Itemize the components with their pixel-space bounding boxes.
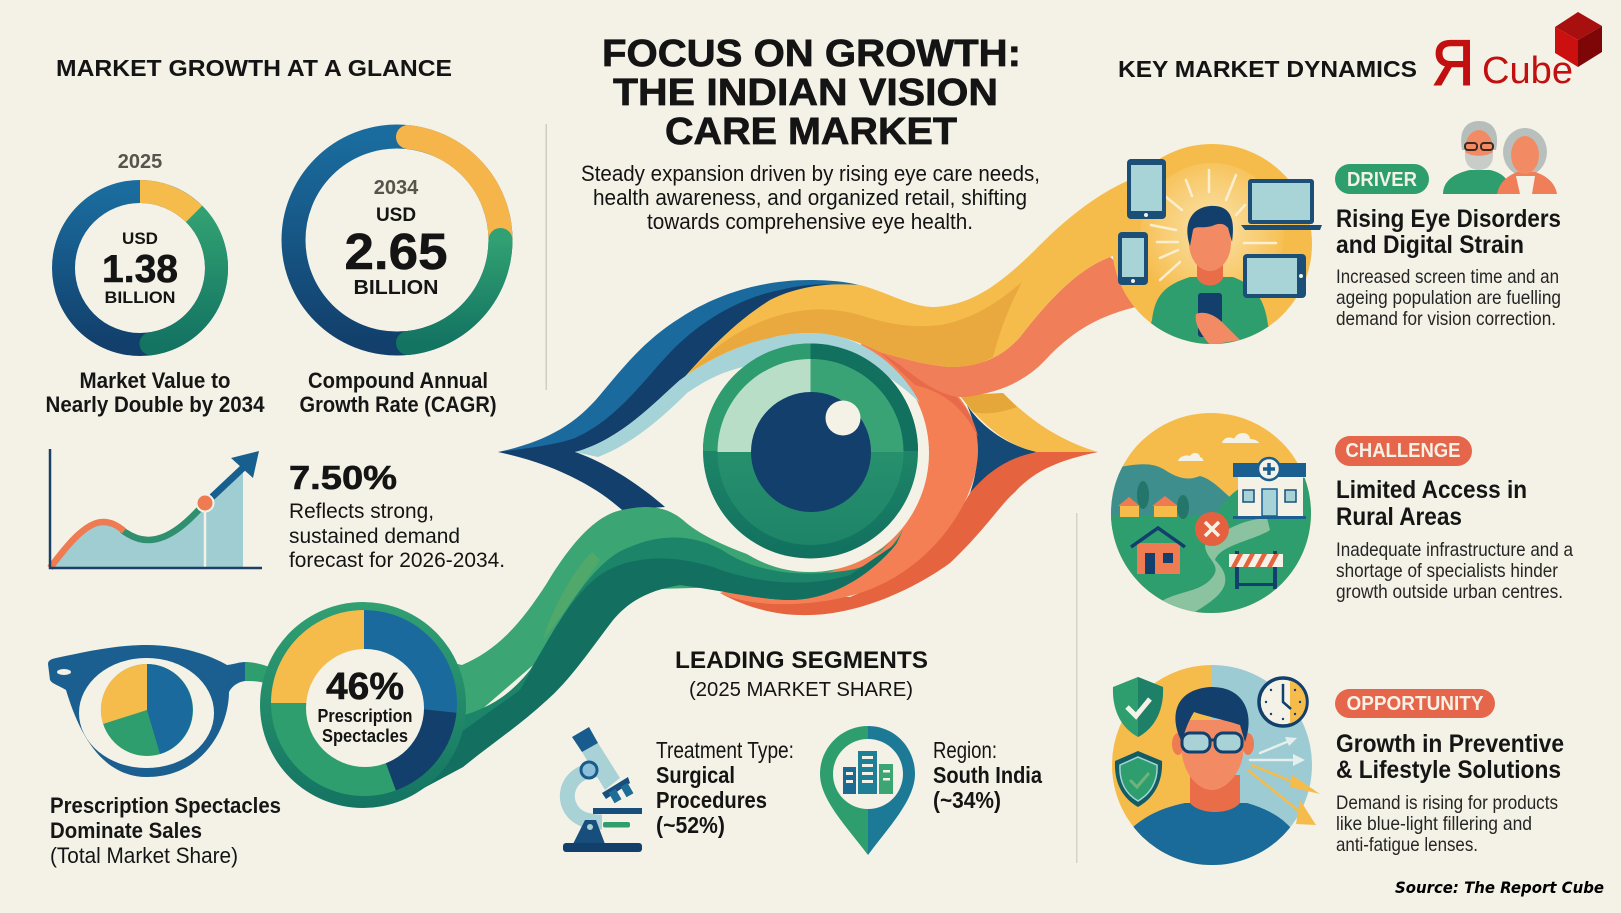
panel divider right	[1076, 513, 1078, 863]
logo: R Cube	[1432, 12, 1602, 99]
badge: opportunity: OPPORTUNITY	[1346, 693, 1484, 715]
ribbon: light orange crescent	[720, 340, 978, 604]
title: FOCUS ON GROWTH:	[602, 33, 1021, 75]
ribbon: light blue lid	[575, 333, 920, 457]
donut: 2025 market value: 2025	[118, 151, 162, 173]
segment text: treatment type	[656, 737, 794, 838]
bridge	[245, 662, 272, 684]
driver body: ageing population are fuelling	[1336, 287, 1561, 309]
segment text: region: South India	[933, 762, 1042, 788]
ears	[1172, 733, 1254, 755]
green shield	[1113, 677, 1163, 737]
segment text: region: Region:	[933, 737, 997, 763]
heading: leading segments	[675, 647, 928, 701]
badge: challenge	[1335, 436, 1472, 466]
ribbon: blue upper lid	[498, 280, 862, 452]
share value: 46%	[326, 666, 404, 708]
ribbon: orange upper flow	[880, 257, 1140, 397]
road barrier	[1229, 551, 1283, 589]
smartphone	[1118, 232, 1148, 285]
opportunity body: like blue-light fillering and	[1336, 813, 1532, 835]
logo: R Cube: Я	[1432, 27, 1474, 99]
glasses frame	[48, 645, 245, 777]
label: prescription spectacles: Dominate Sales	[50, 818, 202, 843]
donut: 2034 market value: BILLION	[354, 277, 438, 299]
tablet	[1127, 159, 1166, 219]
arrow heads	[1285, 737, 1320, 825]
ribbon: yellow flap shade	[960, 393, 1017, 413]
share value	[318, 666, 412, 746]
challenge body: Inadequate infrastructure and a	[1336, 539, 1573, 561]
challenge heading	[1336, 476, 1527, 531]
opportunity heading: Growth in Preventive	[1336, 730, 1564, 758]
heading: leading segments: LEADING SEGMENTS	[675, 647, 928, 674]
opportunity body: anti-fatigue lenses.	[1336, 834, 1478, 856]
clock	[1259, 678, 1307, 726]
card: challenge	[1335, 436, 1573, 603]
donut: 2034 market value: 2.65	[344, 223, 448, 280]
eye white	[691, 334, 929, 572]
person with phone	[1151, 206, 1268, 344]
stat: 7.50% CAGR: Reflects strong,	[289, 499, 434, 523]
icon circle: digital strain	[1112, 144, 1322, 360]
temple rivet	[57, 669, 71, 675]
opportunity body	[1336, 792, 1558, 856]
badge: opportunity	[1335, 689, 1495, 718]
donut: 2025 market value: BILLION	[104, 288, 176, 307]
lens	[79, 658, 214, 768]
challenge heading: Rural Areas	[1336, 503, 1462, 531]
share value: Prescription	[318, 706, 412, 726]
small houses	[1118, 496, 1178, 517]
donut: 2034 market value: USD	[376, 205, 416, 226]
label: market value	[46, 368, 265, 417]
badge: driver	[1335, 164, 1429, 194]
donut: 2034 market value: 2034	[374, 177, 419, 199]
neck	[1190, 775, 1240, 812]
ribbon: yellow flow shade	[690, 282, 1022, 372]
icon: elderly couple	[1443, 121, 1557, 194]
subtitle: health awareness, and organized retail, shifting	[593, 185, 1027, 210]
share ring	[260, 602, 466, 808]
central eye with flowing ribbons	[400, 172, 1170, 790]
cloud small	[1178, 453, 1203, 461]
label: prescription spectacles	[50, 793, 281, 868]
donut: 2025 market value	[64, 151, 217, 344]
hair	[1175, 687, 1249, 742]
shirt	[1133, 803, 1290, 865]
share value: Spectacles	[322, 726, 408, 746]
source credit: Source: The Report Cube	[1395, 878, 1604, 897]
donut: 2025 market value: 1.38	[102, 248, 178, 291]
opportunity body: Demand is rising for products	[1336, 792, 1558, 814]
rays	[1151, 170, 1276, 280]
icon circle: preventive lifestyle	[1110, 665, 1320, 870]
subtitle: Steady expansion driven by rising eye care needs,	[581, 161, 1040, 186]
opportunity heading: & Lifestyle Solutions	[1336, 756, 1561, 784]
badge: driver: DRIVER	[1347, 169, 1418, 191]
cloud	[1222, 433, 1259, 443]
stat: 7.50% CAGR	[289, 459, 505, 572]
icon circle: rural access	[1111, 413, 1311, 613]
challenge body: growth outside urban centres.	[1336, 581, 1563, 603]
card: driver	[1335, 164, 1561, 330]
title: THE INDIAN VISION	[613, 72, 998, 114]
ribbon: yellow upper flow	[680, 172, 1170, 382]
stat: 7.50% CAGR: 7.50%	[289, 459, 397, 496]
donut: 2034 market value	[294, 136, 501, 344]
label: CAGR: Compound Annual	[308, 368, 488, 393]
driver body: demand for vision correction.	[1336, 308, 1556, 330]
ribbon: green highlight	[543, 552, 600, 640]
segment text: treatment type: Surgical	[656, 762, 735, 788]
ribbon: green mid band	[400, 530, 903, 790]
challenge body	[1336, 539, 1573, 603]
share pie: blue	[364, 610, 457, 713]
outlined shield	[1115, 751, 1162, 807]
driver heading	[1336, 205, 1561, 259]
glasses with pie chart	[48, 602, 466, 808]
segment text: region	[933, 737, 1042, 813]
icon: microscope	[563, 727, 642, 852]
segment text: treatment type: Treatment Type:	[656, 737, 794, 763]
driver body	[1336, 266, 1561, 330]
land	[1111, 478, 1311, 613]
landscape tablet	[1243, 254, 1306, 298]
label: prescription spectacles: Prescription Spectacles	[50, 793, 281, 818]
share hole	[306, 649, 424, 767]
card: opportunity	[1335, 689, 1564, 856]
stat: 7.50% CAGR: forecast for 2026-2034.	[289, 548, 505, 572]
lens pie chart	[101, 664, 193, 756]
segment text: treatment type: (~52%)	[656, 812, 725, 838]
ribbon: dark orange lower	[720, 452, 1098, 615]
driver body: Increased screen time and an	[1336, 266, 1559, 288]
ribbon: navy lid outline	[498, 284, 840, 510]
panel divider left	[546, 124, 547, 390]
subtitle: towards comprehensive eye health.	[647, 209, 973, 234]
challenge heading: Limited Access in	[1336, 476, 1527, 504]
stat: 7.50% CAGR: sustained demand	[289, 524, 460, 548]
share pie: yellow	[271, 610, 364, 703]
label: prescription spectacles: (Total Market Share)	[50, 843, 238, 868]
clinic building	[1233, 458, 1306, 519]
driver heading: and Digital Strain	[1336, 231, 1524, 259]
orange house	[1131, 528, 1185, 574]
iris	[703, 344, 918, 558]
label: market value: Market Value to	[80, 368, 230, 393]
ribbon: orange crescent shade	[880, 352, 978, 437]
glasses	[1182, 733, 1242, 752]
trees	[1137, 481, 1189, 519]
segment text: treatment type: Procedures	[656, 787, 767, 813]
subtitle	[581, 161, 1040, 234]
road	[1162, 519, 1270, 612]
ribbon: green light band	[440, 507, 903, 730]
mountains	[1111, 464, 1230, 530]
label: market value: Nearly Double by 2034	[46, 392, 265, 417]
opportunity heading	[1336, 730, 1564, 784]
icon: map pin with buildings	[820, 726, 915, 855]
heading: leading segments: (2025 MARKET SHARE)	[689, 679, 913, 701]
x marker	[1195, 512, 1229, 546]
growth chart	[50, 449, 262, 568]
segment text: region: (~34%)	[933, 787, 1001, 813]
challenge body: shortage of specialists hinder	[1336, 560, 1558, 582]
laptop	[1241, 179, 1322, 230]
donut: 2025 market value: USD	[122, 229, 158, 248]
heading: market growth at a glance: MARKET GROWTH AT A GLANCE	[56, 55, 452, 81]
title: CARE MARKET	[665, 111, 957, 153]
share pie: navy	[364, 703, 456, 790]
arrows	[1248, 739, 1312, 820]
ribbon: navy corner	[967, 405, 1037, 493]
logo: R Cube: Cube	[1482, 50, 1573, 92]
share pie: green	[271, 703, 396, 796]
title	[602, 33, 1021, 153]
ribbon: yellow right flap	[960, 393, 1098, 452]
face	[1182, 720, 1243, 790]
label: CAGR: Growth Rate (CAGR)	[300, 392, 496, 417]
badge: challenge: CHALLENGE	[1346, 440, 1460, 462]
label: CAGR	[300, 368, 496, 417]
ribbon: green dark band	[420, 543, 897, 790]
heading: key market dynamics: KEY MARKET DYNAMICS	[1118, 56, 1417, 82]
driver heading: Rising Eye Disorders	[1336, 205, 1561, 233]
